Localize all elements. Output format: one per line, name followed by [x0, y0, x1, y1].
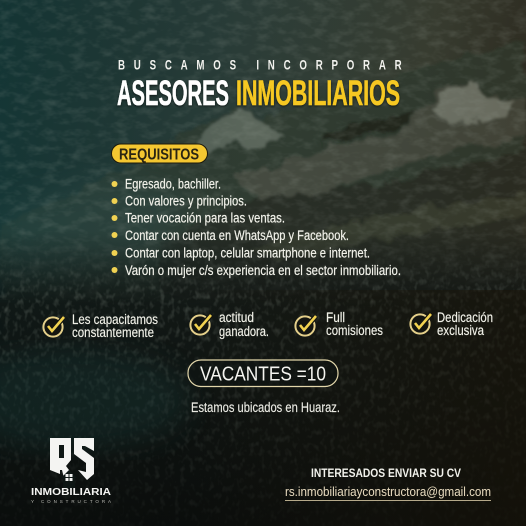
item: egresado: Egresado, bachiller. — [125, 176, 221, 192]
contact email: rs.inmobiliariayconstructora@gmail.com — [285, 484, 491, 499]
item: experiencia: Varón o mujer c/s experiencia en el sector inmobiliario. — [125, 263, 401, 278]
item: whatsapp: Contar con cuenta en WhatsApp y Facebook. — [125, 228, 349, 243]
email underline — [285, 500, 491, 501]
item: laptop: Contar con laptop, celular smartphone e internet. — [125, 246, 370, 260]
benefit: comisiones: Full — [326, 310, 345, 325]
benefit: actitud — [190, 310, 269, 339]
benefit: capacitamos: Les capacitamos — [72, 312, 158, 327]
logo text: y constructora: Y CONSTRUCTORA — [31, 499, 111, 504]
heading: buscamos incorporar: BUSCAMOS INCORPORAR — [118, 58, 402, 73]
icon: check — [410, 314, 431, 334]
benefit: comisiones: comisiones — [326, 323, 383, 338]
benefit: comisiones — [295, 310, 383, 338]
benefit: capacitamos: constantemente — [72, 325, 154, 340]
list: requirements — [112, 176, 401, 278]
benefit: dedicacion — [410, 310, 493, 338]
pill: vacantes: VACANTES =10 — [200, 364, 326, 386]
benefit: dedicacion: Dedicación — [437, 310, 493, 325]
title: asesores inmobiliarios — [117, 74, 400, 113]
icon: check — [295, 316, 316, 336]
benefit: actitud: actitud — [219, 310, 254, 325]
benefit: dedicacion: exclusiva — [437, 323, 484, 338]
contact: call to action — [285, 466, 491, 501]
item: valores: Con valores y principios. — [125, 194, 247, 208]
logo text: inmobiliaria: INMOBILIARIA — [31, 486, 111, 498]
location text: Estamos ubicados en Huaraz. — [191, 400, 340, 415]
benefit: actitud: ganadora. — [219, 324, 269, 339]
icon: check — [43, 317, 64, 337]
contact heading: INTERESADOS ENVIAR SU CV — [311, 466, 461, 480]
logo: RS inmobiliaria — [31, 438, 111, 504]
title: asesores inmobiliarios: ASESORES — [117, 74, 229, 113]
item: vocacion: Tener vocación para las ventas. — [125, 210, 285, 226]
logo mark: RS shield — [50, 438, 94, 488]
badge: requisitos: REQUISITOS — [119, 146, 199, 164]
benefit: capacitamos — [43, 312, 158, 340]
title: asesores inmobiliarios: INMOBILIARIOS — [236, 74, 400, 113]
icon: check — [190, 315, 211, 335]
